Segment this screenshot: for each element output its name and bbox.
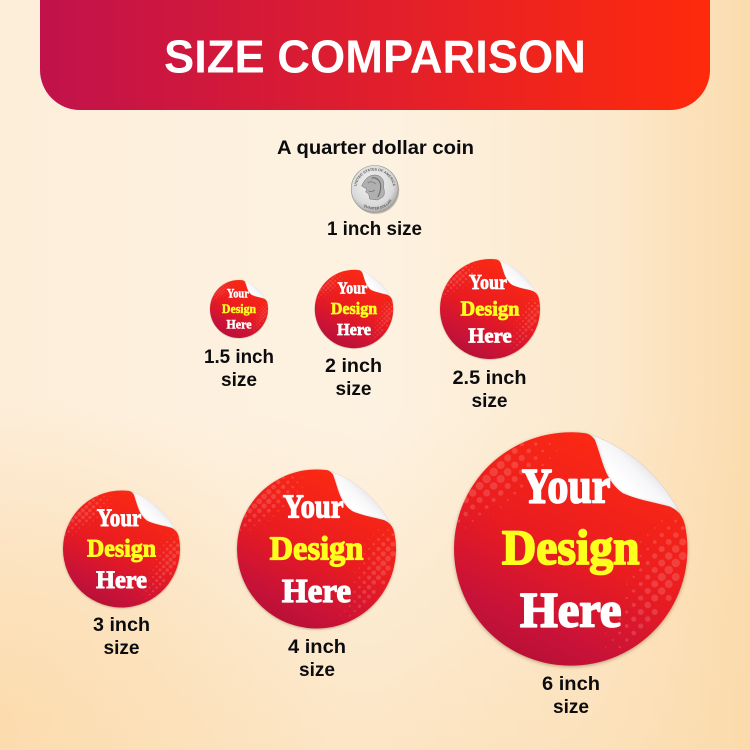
sticker: 6 inch	[454, 432, 687, 666]
header banner	[40, 0, 710, 110]
label: 3 inch size	[93, 614, 150, 659]
icon: quarter dollar coin: UNITED STATES OF AMERICA	[354, 168, 396, 186]
sticker: 2.5 inch: Here	[468, 323, 512, 347]
sticker: 2.5 inch: Your	[469, 270, 507, 294]
sticker: 6 inch: Your	[522, 458, 610, 514]
label: 6 inch size	[542, 673, 600, 718]
sticker: 4 inch	[237, 469, 396, 628]
sticker: 3 inch: Your	[97, 505, 141, 532]
label: 2 inch size: size	[336, 378, 372, 400]
sticker: 3 inch	[63, 490, 180, 607]
sticker: 2 inch	[315, 270, 393, 348]
title: SIZE COMPARISON	[164, 30, 586, 82]
label: 2.5 inch size: 2.5 inch	[452, 367, 526, 389]
sticker: 6 inch: Here	[520, 582, 621, 638]
sticker: 4 inch: Here	[282, 573, 351, 610]
label: 2 inch size	[325, 355, 382, 400]
label: 1 inch size: 1 inch size	[327, 218, 422, 240]
sticker: 4 inch: Your	[283, 488, 344, 525]
coin heading: A quarter dollar coin	[277, 137, 474, 159]
label: 3 inch size: size	[104, 637, 140, 659]
sticker: 3 inch: Design	[87, 536, 156, 563]
sticker: 2 inch: Design	[331, 299, 378, 318]
sticker: 1.5 inch: Your	[227, 286, 249, 300]
label: 1.5 inch size	[204, 346, 274, 391]
sticker: 3 inch: Here	[96, 567, 147, 594]
label: 4 inch size: 4 inch	[288, 636, 346, 658]
sticker: 1.5 inch: Here	[226, 317, 252, 331]
sticker: 1.5 inch: Design	[222, 302, 256, 316]
sticker: 1.5 inch	[210, 280, 268, 338]
icon: quarter dollar coin	[350, 165, 400, 214]
sticker: 6 inch: Design	[502, 519, 640, 575]
label: 2.5 inch size: size	[472, 390, 508, 412]
label: 3 inch size: 3 inch	[93, 614, 150, 636]
label: 2 inch size: 2 inch	[325, 355, 382, 377]
label: 4 inch size: size	[299, 659, 335, 681]
sticker: 2 inch: Here	[337, 320, 372, 339]
label: 1.5 inch size: size	[221, 369, 257, 391]
sticker: 2.5 inch	[440, 259, 540, 359]
label: 1.5 inch size: 1.5 inch	[204, 346, 274, 368]
sticker: 2 inch: Your	[338, 278, 368, 297]
icon: quarter dollar coin: QUARTER DOLLAR	[364, 199, 392, 210]
sticker: 2.5 inch: Design	[460, 296, 520, 320]
label: 2.5 inch size	[452, 367, 526, 412]
sticker: 4 inch: Design	[270, 530, 363, 567]
label: 6 inch size: size	[553, 696, 589, 718]
label: 6 inch size: 6 inch	[542, 673, 600, 695]
label: 4 inch size	[288, 636, 346, 681]
